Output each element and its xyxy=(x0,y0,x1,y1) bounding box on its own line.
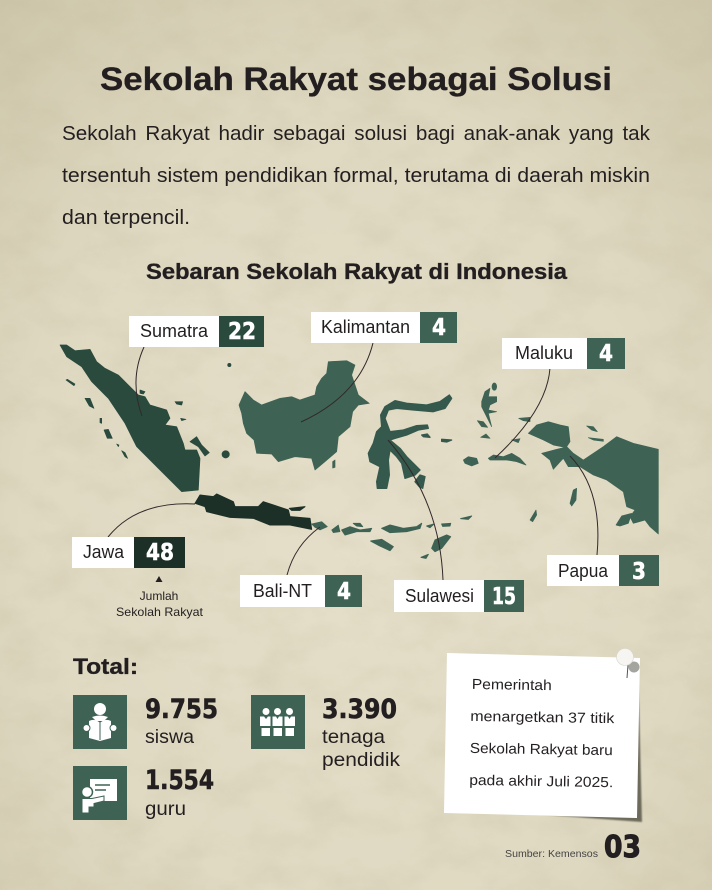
stat: siswa: 9.755 xyxy=(145,694,218,725)
label: Kalimantan 4 xyxy=(311,312,457,343)
note text: pada akhir Juli 2025. xyxy=(469,773,613,791)
note text xyxy=(469,677,616,791)
region: Kalimantan xyxy=(239,361,369,470)
label: Sumatra 22: 22 xyxy=(228,319,256,345)
label: Jawa 48 xyxy=(72,537,185,568)
map heading: Sebaran Sekolah Rakyat di Indonesia xyxy=(146,259,568,284)
intro paragraph: tersentuh sistem pendidikan formal, terutama di daerah miskin xyxy=(62,164,650,187)
region: Bali-NT xyxy=(312,522,340,533)
note: Jumlah Sekolah Rakyat: Sekolah Rakyat xyxy=(116,605,204,619)
intro paragraph: Sekolah Rakyat hadir sebagai solusi bagi anak-anak yang tak xyxy=(62,122,651,145)
region: Sumatra xyxy=(60,345,231,492)
leader lines xyxy=(108,343,598,580)
stat: tenaga pendidik: tenaga xyxy=(322,726,385,748)
heading: Total: Total: xyxy=(73,654,138,679)
region: Sulawesi xyxy=(368,395,452,488)
label: Jawa 48: Jawa xyxy=(83,542,125,562)
label: Sumatra 22: Sumatra xyxy=(140,321,209,341)
note: Jumlah Sekolah Rakyat: Jumlah xyxy=(140,589,178,603)
region: Maluku xyxy=(463,383,537,522)
label: Kalimantan 4: Kalimantan xyxy=(321,317,410,337)
region: Papua xyxy=(528,422,658,534)
note text: Sekolah Rakyat baru xyxy=(470,741,613,759)
label: Jawa 48: 48 xyxy=(146,540,174,566)
icon: push pin xyxy=(616,648,640,678)
source credit: Sumber: Kemensos xyxy=(505,848,598,860)
stat: guru: 1.554 xyxy=(145,765,214,796)
region: Jawa xyxy=(195,494,312,529)
stat: tenaga pendidik: 3.390 xyxy=(322,694,397,725)
label: Bali-NT 4 xyxy=(240,575,362,607)
stat: tenaga pendidik xyxy=(251,694,400,771)
stat: siswa xyxy=(73,694,218,749)
label: Sulawesi 15: 15 xyxy=(492,584,516,610)
label: Bali-NT 4: Bali-NT xyxy=(253,581,312,601)
label: Papua 3: 3 xyxy=(632,559,646,585)
label: Maluku 4 xyxy=(502,338,625,369)
label: Sumatra 22 xyxy=(129,316,264,347)
label: Papua 3 xyxy=(547,555,659,586)
title: Sekolah Rakyat sebagai Solusi xyxy=(100,61,612,97)
icon: student reading xyxy=(73,695,127,749)
page number: 03 xyxy=(604,830,641,865)
note: Jumlah Sekolah Rakyat xyxy=(116,576,204,619)
label: Maluku 4: Maluku xyxy=(515,343,573,363)
stat: siswa: siswa xyxy=(145,726,194,748)
label: Maluku 4: 4 xyxy=(599,341,613,367)
stat: guru xyxy=(73,765,214,820)
label: Papua 3: Papua xyxy=(558,561,609,581)
label: Kalimantan 4: 4 xyxy=(432,315,446,341)
label: Sulawesi 15: Sulawesi xyxy=(405,586,474,606)
icon: teacher at board xyxy=(73,766,127,820)
icon: group of educators xyxy=(251,695,305,749)
stat: guru: guru xyxy=(145,798,186,820)
intro paragraph: dan terpencil. xyxy=(62,206,190,229)
note text: menargetkan 37 titik xyxy=(470,709,615,727)
label: Bali-NT 4: 4 xyxy=(337,579,351,605)
sticky note xyxy=(444,648,642,822)
note text: Pemerintah xyxy=(472,677,552,694)
label: Sulawesi 15 xyxy=(394,580,524,612)
map of Indonesia xyxy=(60,343,658,580)
stat: tenaga pendidik: pendidik xyxy=(322,749,400,771)
intro paragraph xyxy=(62,122,651,229)
